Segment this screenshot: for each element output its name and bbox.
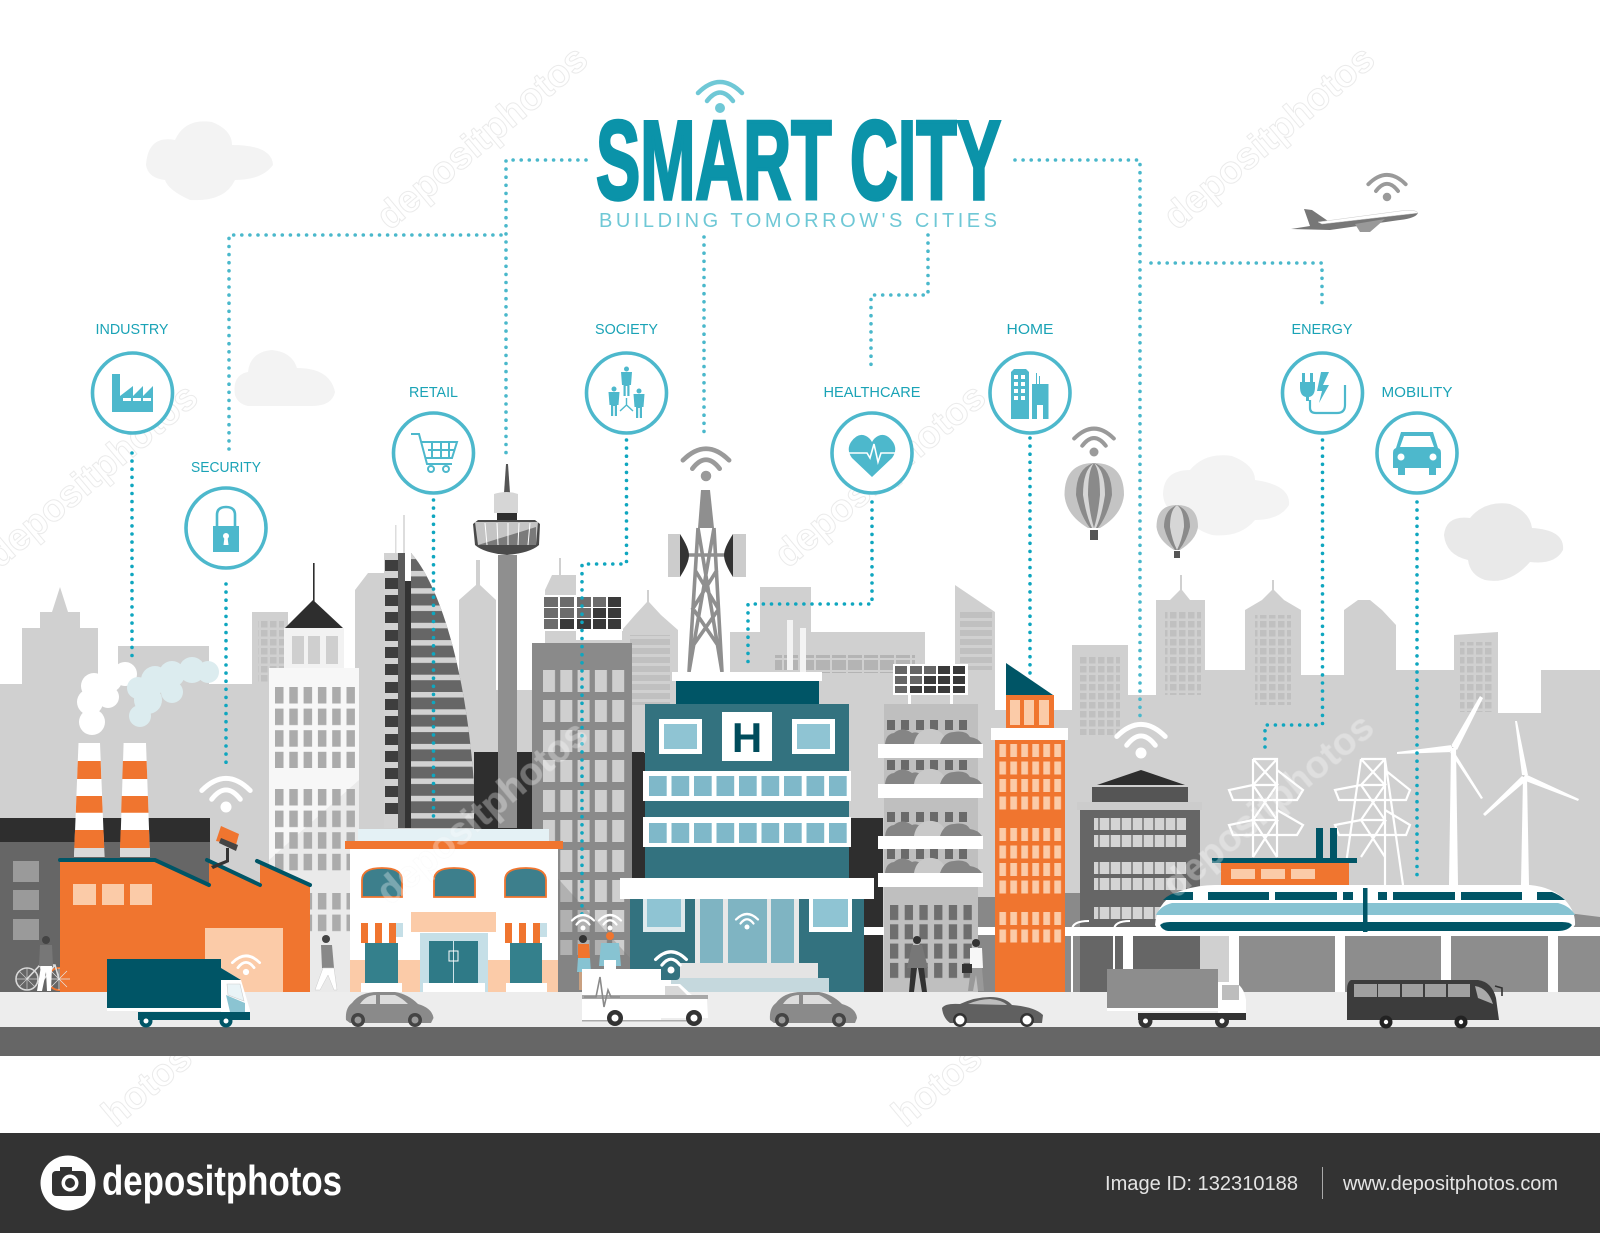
category: mobility: MOBILITY — [1382, 384, 1452, 401]
grey office building with solar panel — [532, 595, 632, 992]
man in blue — [599, 932, 621, 970]
footer bar — [0, 1133, 1600, 1233]
category: industry — [92, 321, 172, 433]
stock watermarks: hotos — [94, 1036, 200, 1135]
retail store — [345, 829, 563, 992]
icon: padlock — [213, 507, 239, 552]
footer image id: Image ID: 132310188 — [1105, 1173, 1298, 1195]
solar panel — [542, 595, 623, 631]
icon: title wifi — [698, 82, 742, 113]
icon: people network — [608, 366, 644, 418]
smoke — [77, 657, 219, 735]
icon: plug and bolt — [1300, 372, 1345, 413]
category: industry: INDUSTRY — [96, 321, 168, 338]
city watermarks: depositphotos — [1155, 706, 1382, 906]
icon: truck wifi — [232, 956, 260, 975]
grey building right — [1065, 724, 1202, 992]
stock watermarks: hotos — [884, 1036, 990, 1135]
category: healthcare: HEALTHCARE — [824, 384, 920, 401]
pylons — [1229, 759, 1410, 885]
terrace building — [878, 664, 995, 992]
category: society — [586, 321, 666, 433]
street — [0, 992, 1600, 1056]
connector lines — [132, 160, 1417, 916]
icon: tower wifi — [683, 449, 729, 481]
title: SMART CITY — [596, 98, 1001, 223]
hospital — [620, 672, 884, 992]
H sign: H — [732, 714, 762, 761]
icon: factory — [112, 374, 153, 412]
icon: apartment buildings — [1011, 369, 1048, 419]
stock watermarks: depositphotos — [767, 376, 994, 576]
title: BUILDING TOMORROW'S CITIES — [599, 210, 997, 232]
category: security — [186, 459, 266, 568]
category: retail — [394, 384, 474, 493]
person with bicycle — [16, 936, 70, 991]
wifi pair — [572, 915, 621, 930]
stock watermarks — [0, 38, 1383, 1135]
businesswoman — [962, 939, 984, 991]
category: home: HOME — [1006, 321, 1054, 338]
stock watermarks: depositphotos — [1156, 38, 1383, 238]
power plant — [1212, 828, 1357, 886]
small balloon — [1156, 505, 1198, 558]
antenna tower — [668, 449, 746, 672]
icon: camera wifi — [202, 778, 250, 812]
icon: balloon wifi — [1074, 429, 1114, 456]
category: security: SECURITY — [191, 459, 261, 476]
security camera — [211, 826, 239, 869]
city watermarks — [369, 706, 1382, 913]
woman in orange — [577, 935, 591, 990]
orange tower — [991, 663, 1068, 992]
category: energy: ENERGY — [1292, 321, 1352, 338]
icon: shopping cart — [411, 434, 457, 472]
dark sports car — [942, 997, 1043, 1027]
footer url: www.depositphotos.com — [1342, 1173, 1558, 1195]
rail viaduct — [1065, 912, 1600, 992]
dark building left — [0, 818, 210, 992]
bus — [1347, 980, 1502, 1028]
grey lorry — [1107, 969, 1246, 1028]
H sign — [722, 712, 772, 761]
icon: door wifi — [736, 914, 758, 930]
background clouds — [146, 121, 1563, 581]
title — [596, 82, 1001, 232]
train — [1155, 885, 1575, 933]
people — [16, 915, 984, 992]
dark base band — [474, 752, 644, 830]
icon: car — [1393, 432, 1441, 475]
balloons — [1064, 429, 1198, 558]
large balloon — [1064, 463, 1124, 540]
teal delivery truck — [107, 956, 260, 1028]
category: energy — [1282, 321, 1362, 433]
icon: heart with pulse — [849, 435, 896, 477]
curved skyscraper — [384, 515, 476, 828]
white tower — [269, 563, 359, 992]
category: society: SOCIETY — [595, 321, 658, 338]
factory — [60, 657, 310, 992]
lamp posts — [1072, 921, 1130, 992]
city watermarks: depositphotos — [369, 713, 596, 913]
wind turbines — [1397, 696, 1579, 885]
category: home — [990, 321, 1070, 433]
stock watermarks: depositphotos — [369, 38, 596, 238]
observation tower — [473, 464, 540, 828]
plane with wifi — [1291, 175, 1418, 232]
footer logo: depositphotos — [102, 1157, 342, 1204]
pedestrian — [315, 935, 337, 990]
ambulance — [582, 952, 708, 1026]
grey car two — [770, 992, 857, 1027]
footer logo — [40, 1156, 342, 1210]
woman in grey — [907, 936, 928, 992]
category: mobility — [1377, 384, 1457, 493]
background skyline — [0, 558, 1600, 992]
grey car one — [346, 992, 434, 1027]
solar panel — [893, 664, 968, 704]
icon: ambulance wifi — [656, 952, 686, 974]
awnings — [361, 923, 547, 943]
chimneys — [74, 743, 150, 857]
icon: wifi — [1117, 724, 1165, 758]
category: retail: RETAIL — [409, 384, 458, 401]
category: healthcare — [824, 384, 920, 493]
